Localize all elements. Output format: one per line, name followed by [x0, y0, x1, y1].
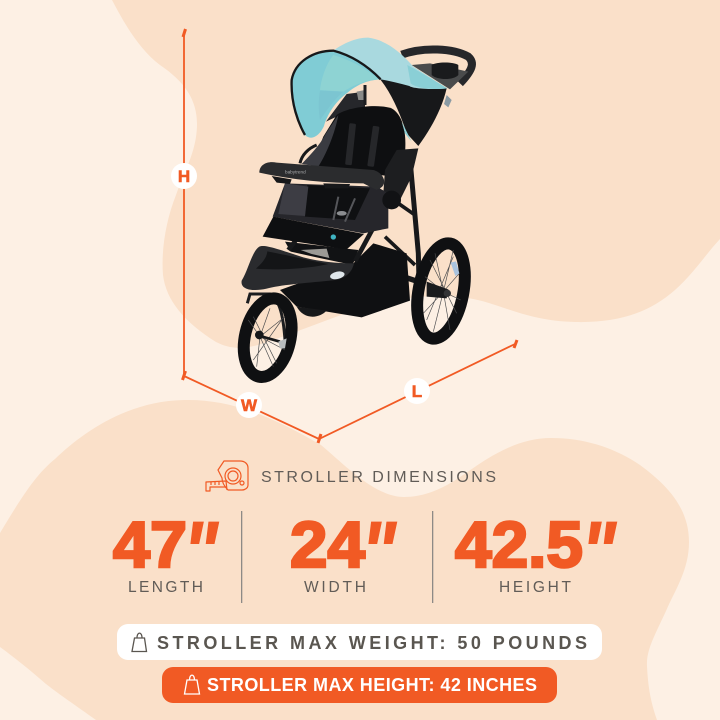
divider: [432, 511, 433, 603]
handlebar: [402, 49, 472, 83]
label: W: W: [241, 396, 258, 415]
stat: height: 42.5: [455, 508, 583, 581]
canopy black side panel: [379, 78, 447, 146]
label: L: [404, 378, 430, 404]
stroller illustration: [237, 38, 472, 382]
stat: width: WIDTH: [304, 579, 366, 596]
canopy hinge: [357, 90, 365, 100]
seat back: [310, 106, 405, 177]
leg rest: [263, 217, 364, 249]
rear frame: [385, 167, 423, 297]
icon: weight: [132, 633, 146, 652]
label: L: L: [412, 382, 422, 401]
pill: max weight: STROLLER MAX WEIGHT: 50 POUNDS: [157, 633, 587, 653]
stat: width: [290, 505, 397, 600]
label: H: H: [178, 167, 190, 186]
stat: length: LENGTH: [128, 579, 203, 596]
stat: length: [113, 505, 219, 600]
dimension lines: [182, 29, 517, 443]
seat area: [273, 183, 388, 233]
stat: height: [455, 505, 617, 600]
stroller illustration: babytrend: [285, 169, 306, 174]
divider: [241, 511, 242, 603]
stat: height: HEIGHT: [499, 579, 572, 596]
icon: tape measure: [206, 461, 248, 491]
heading: stroller dimensions: [206, 461, 496, 491]
child tray: [259, 162, 384, 190]
seat fabric behind canopy: [326, 92, 365, 122]
canopy top: [333, 38, 447, 89]
stat: length: 47: [113, 508, 187, 581]
icon: weight: [184, 675, 200, 694]
rear wheel: [410, 239, 472, 343]
stat: length: ": [183, 505, 219, 600]
heading: stroller dimensions: STROLLER DIMENSIONS: [261, 469, 496, 486]
stat: width: 24: [290, 508, 365, 581]
seat frame tube: [355, 218, 378, 262]
stat: height: ": [581, 505, 617, 600]
side joint: [383, 148, 418, 200]
canopy inner: [292, 51, 381, 138]
under-seat gap: [285, 242, 358, 265]
front tray: [242, 246, 354, 290]
canopy rim: [292, 51, 381, 135]
pill: max weight: [117, 624, 602, 660]
background blob: bottom: [0, 400, 689, 720]
label: H: [171, 163, 197, 189]
basket: [280, 243, 410, 317]
stat: width: ": [361, 505, 397, 600]
pill: max height: STROLLER MAX HEIGHT: 42 INCHES: [207, 675, 537, 695]
label: W: [236, 392, 262, 418]
armrest arc: [300, 145, 317, 163]
background blob: top: [112, 0, 720, 348]
parent tray: [412, 63, 468, 89]
pill: max height: [162, 667, 557, 703]
front wheel: [237, 294, 299, 382]
